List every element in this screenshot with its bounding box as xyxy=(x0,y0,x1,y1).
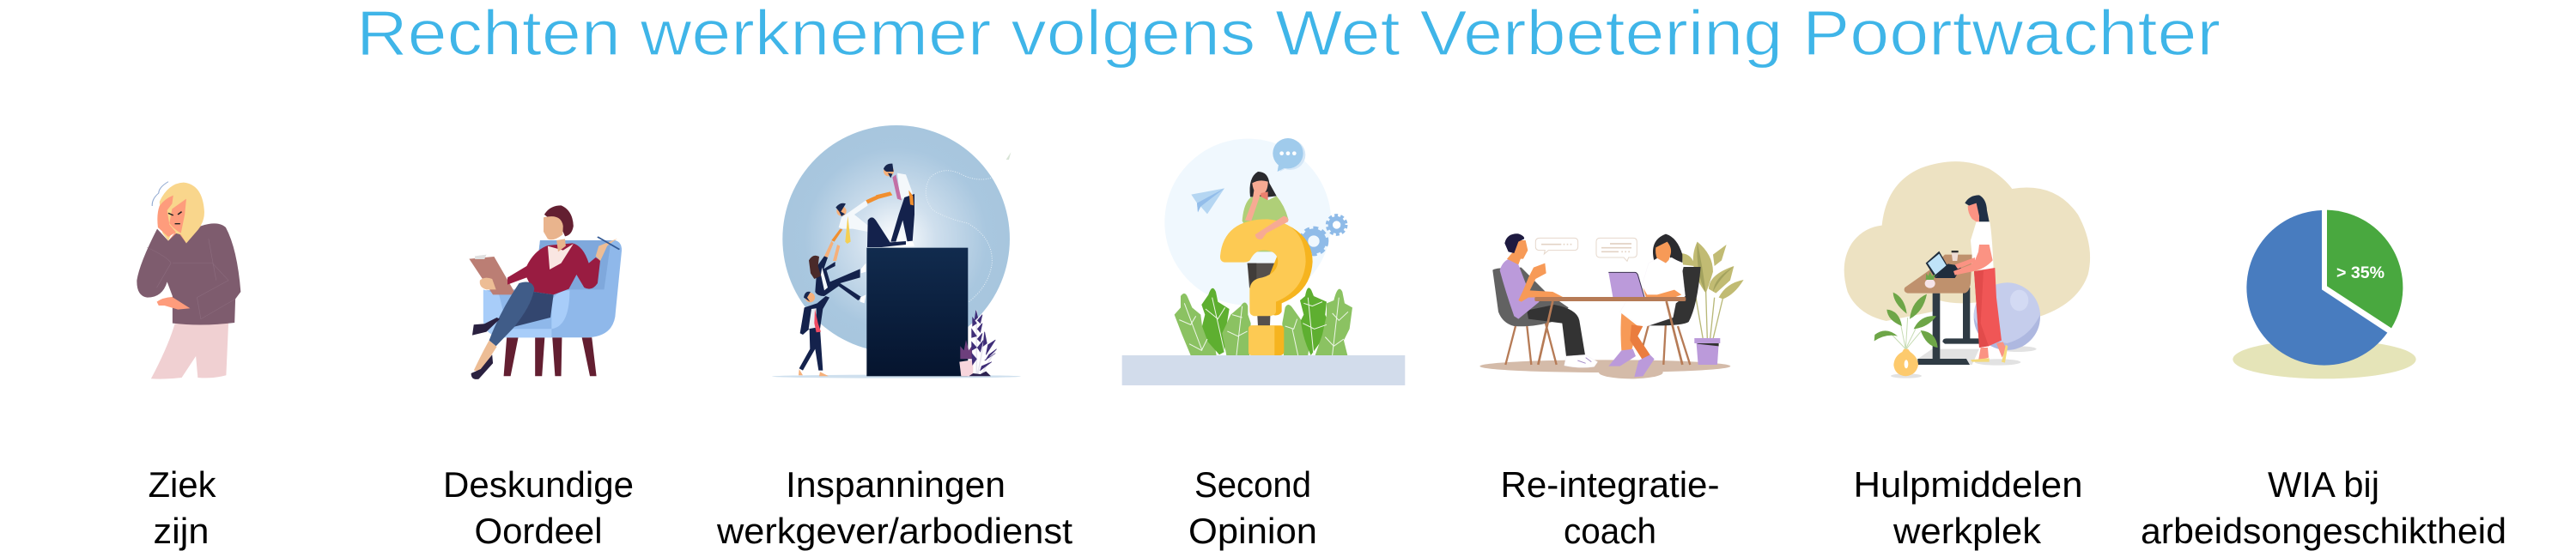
label: Deskundige Oordeel: Oordeel xyxy=(474,511,603,551)
illustration: second opinion question mark xyxy=(1122,138,1405,385)
illustration: sick person xyxy=(137,182,240,379)
chairs xyxy=(1492,267,1701,365)
man xyxy=(1500,233,1598,367)
label: Re-integratie-coach xyxy=(1501,464,1719,551)
shadows xyxy=(1891,346,2037,378)
question mark xyxy=(1220,216,1313,355)
illustration: colleagues climbing a block xyxy=(772,125,1021,378)
woman xyxy=(1953,195,2008,363)
laptop xyxy=(1926,251,1962,278)
table xyxy=(1534,297,1686,365)
illustration: expert in armchair xyxy=(469,205,622,379)
leaves xyxy=(1175,288,1352,355)
label: Inspanningen werkgever/arbodienst: Inspanningen xyxy=(786,464,1005,505)
illustration: re-integration coach meeting xyxy=(1479,233,1744,378)
third person xyxy=(809,241,866,303)
label: Second Opinion: Opinion xyxy=(1188,511,1317,551)
woman xyxy=(1242,172,1289,326)
label: Ziek zijn xyxy=(148,464,216,551)
label: Hulpmiddelen werkplek xyxy=(1853,464,2083,551)
label: Hulpmiddelen werkplek: Hulpmiddelen xyxy=(1853,464,2083,505)
illustration: ergonomic standing desk xyxy=(1844,161,2090,378)
top person xyxy=(876,164,914,246)
label: Inspanningen werkgever/arbodienst: werkgever/arbodienst xyxy=(716,511,1072,551)
coffee cup and desk plant xyxy=(1925,251,1959,288)
label: Second Opinion xyxy=(1188,464,1317,551)
woman xyxy=(1608,234,1686,377)
label: WIA bij arbeidsongeschiktheid xyxy=(2141,464,2506,551)
label: Ziek zijn: zijn xyxy=(153,511,210,551)
bottom person xyxy=(799,292,829,376)
label: Re-integratie-coach: Re-integratie- xyxy=(1501,464,1719,505)
paper plane xyxy=(1191,188,1224,214)
label: Deskundige Oordeel: Deskundige xyxy=(443,464,634,505)
exercise ball xyxy=(1974,282,2040,350)
pie chart: more than 35%: > 35% xyxy=(2336,264,2385,282)
pie chart: more than 35% xyxy=(2233,210,2416,378)
label: Second Opinion: Second xyxy=(1194,464,1311,505)
gears xyxy=(1301,215,1346,254)
plant xyxy=(1681,242,1744,365)
label: WIA bij arbeidsongeschiktheid: WIA bij xyxy=(2268,464,2379,505)
cloud background xyxy=(1844,161,2090,321)
label: WIA bij arbeidsongeschiktheid: arbeidsongeschiktheid xyxy=(2141,511,2506,551)
label: Hulpmiddelen werkplek: werkplek xyxy=(1893,511,2042,551)
speech bubbles xyxy=(1535,238,1637,261)
label: Inspanningen werkgever/arbodienst xyxy=(716,464,1072,551)
label: Deskundige Oordeel xyxy=(443,464,634,551)
floor plant xyxy=(1874,293,1938,376)
speech bubble xyxy=(1273,138,1305,172)
label: Ziek zijn: Ziek xyxy=(148,464,216,505)
second person xyxy=(831,195,906,247)
plants xyxy=(959,311,997,376)
desk xyxy=(1917,288,1981,365)
label: Re-integratie-coach: coach xyxy=(1564,511,1656,551)
